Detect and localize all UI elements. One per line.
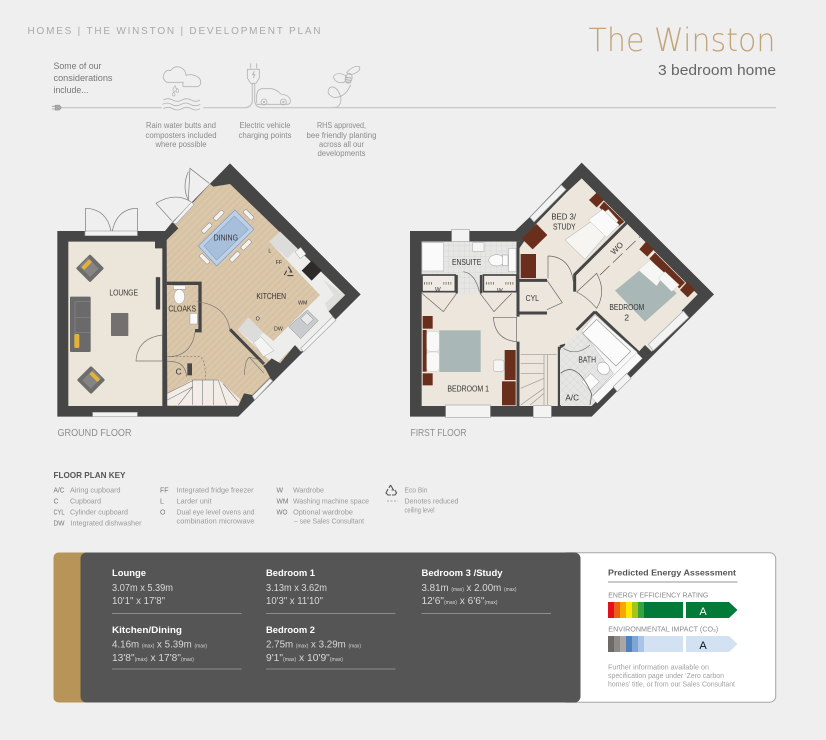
key column 2: FF xyxy=(160,488,169,494)
room labels xyxy=(435,211,644,402)
caption: bee friendly: RHS approved, xyxy=(317,121,366,130)
bedroom 3 dimensions: 3.81m (max) x 2.00m (max) xyxy=(422,583,517,594)
floor plan key xyxy=(54,470,459,528)
room labels: FF xyxy=(276,260,283,266)
breadcrumb header: HOMES | THE WINSTON | DEVELOPMENT PLAN xyxy=(28,26,320,37)
key column 4: Denotes reduced xyxy=(404,498,459,506)
walls outer xyxy=(57,163,361,417)
sofa xyxy=(70,297,91,352)
coffee table xyxy=(111,313,128,336)
caption: rain water: Rain water butts and xyxy=(146,121,216,130)
bedroom 3 dimensions xyxy=(422,568,551,614)
bedroom 2 dimensions: 2.75m (max) x 3.29m (max) xyxy=(266,640,361,650)
wardrobes xyxy=(422,275,517,292)
bedroom 3 dimensions: 12'6"(max) x 6'6"(max) xyxy=(422,596,498,607)
room labels: ENSUITE xyxy=(452,257,482,267)
caption: bee friendly: across all our xyxy=(319,140,364,149)
caption: electric vehicle: Electric vehicle xyxy=(240,121,291,130)
walls outer xyxy=(410,163,714,417)
key column 3: WO xyxy=(276,510,288,516)
icon: plug end xyxy=(52,105,61,110)
room labels: WM xyxy=(298,300,307,306)
icon: eco bin xyxy=(284,267,293,276)
room labels: W xyxy=(497,289,503,295)
room labels: DINING xyxy=(214,232,238,242)
armchair bottom xyxy=(77,366,105,394)
bathroom xyxy=(560,315,642,405)
intro text xyxy=(54,61,113,95)
doors xyxy=(422,256,602,342)
brown furniture xyxy=(423,193,695,405)
key column 3: Washing machine space xyxy=(293,498,369,506)
ground floor label: GROUND FLOOR xyxy=(58,427,132,439)
icon: rain cloud xyxy=(162,67,201,110)
key column 2: O xyxy=(160,510,166,516)
room labels: KITCHEN xyxy=(256,291,286,301)
room labels: BEDROOM 1 xyxy=(447,383,489,393)
key column 4: ceiling level xyxy=(404,508,435,514)
dining table xyxy=(198,209,254,266)
key column 1: CYL xyxy=(54,510,65,516)
room dimensions panel xyxy=(80,552,580,702)
intro text: Some of our xyxy=(54,61,102,71)
energy heading: Predicted Energy Assessment xyxy=(608,568,736,578)
wood floor xyxy=(167,184,345,406)
room labels: DW xyxy=(274,326,284,332)
key column 3 xyxy=(276,488,369,526)
room labels: STUDY xyxy=(553,221,576,231)
sink xyxy=(289,310,318,339)
energy footnote: Further information available on xyxy=(608,664,709,672)
room labels: 2 xyxy=(624,312,629,322)
energy footnote: homes’ title, or from our Sales Consultant xyxy=(608,682,735,688)
caption: electric vehicle xyxy=(238,121,292,140)
windows xyxy=(446,185,689,418)
subtitle: 3 bedroom home xyxy=(658,62,776,79)
interior walls xyxy=(457,223,638,406)
key column 1: Cylinder cupboard xyxy=(70,510,128,516)
bedroom 1 dimensions: 3.13m x 3.62m xyxy=(266,583,327,594)
bedroom 3 dimensions: Bedroom 3 /Study xyxy=(422,568,503,579)
icon: bee xyxy=(328,66,360,107)
environmental impact rating xyxy=(608,625,738,652)
ground floor plan xyxy=(57,163,361,417)
room labels: O xyxy=(256,317,260,323)
toilet and basin xyxy=(173,285,197,324)
key column 2: Integrated fridge freezer xyxy=(176,488,254,494)
key heading: FLOOR PLAN KEY xyxy=(54,470,126,480)
kitchen dimensions: Kitchen/Dining xyxy=(112,625,182,636)
key column 3: W xyxy=(276,488,284,494)
key column 4: Eco Bin xyxy=(404,488,428,494)
lounge dimensions: 3.07m x 5.39m xyxy=(112,583,173,594)
ensuite floor xyxy=(422,242,517,293)
key column 3: Wardrobe xyxy=(293,488,324,494)
caption: bee friendly: bee friendly planting xyxy=(306,131,376,140)
room labels: BEDROOM xyxy=(609,302,644,312)
lounge dimensions xyxy=(112,568,242,614)
key column 1: DW xyxy=(54,520,65,528)
first floor plan xyxy=(410,163,714,418)
key column 3: Optional wardrobe xyxy=(293,510,353,516)
title: The Winston xyxy=(588,21,776,59)
windows and door openings xyxy=(85,202,336,417)
kitchen dimensions xyxy=(112,625,242,669)
room labels: W xyxy=(435,287,441,293)
kitchen dimensions: 4.16m (max) x 5.39m (max) xyxy=(112,640,207,650)
energy footnote xyxy=(608,664,735,688)
key column 1 xyxy=(54,488,142,528)
gold tab xyxy=(54,552,114,702)
intro text: considerations xyxy=(54,73,113,83)
room labels: LOUNGE xyxy=(109,287,138,297)
icons and connecting cable xyxy=(52,63,776,110)
caption: bee friendly xyxy=(306,121,376,158)
room labels: C xyxy=(176,366,182,376)
interior walls xyxy=(156,242,264,406)
bedroom 2 dimensions: Bedroom 2 xyxy=(266,625,315,636)
caption: rain water: where possible xyxy=(155,140,207,149)
beds xyxy=(427,209,679,372)
stairs xyxy=(521,355,557,405)
first floor label: FIRST FLOOR xyxy=(410,427,467,439)
lounge dimensions: Lounge xyxy=(112,568,146,579)
intro text: include... xyxy=(54,85,88,95)
wardrobe WO dashed xyxy=(600,237,640,275)
key column 2: Larder unit xyxy=(176,498,212,506)
energy efficiency rating xyxy=(608,590,738,618)
armchair top xyxy=(76,254,104,282)
caption: bee friendly: developments xyxy=(318,149,366,158)
key column 2: Dual eye level ovens and xyxy=(176,510,255,516)
key column 1: Integrated dishwasher xyxy=(70,520,142,528)
room labels: WO xyxy=(609,240,625,256)
room labels: L xyxy=(268,249,271,255)
key column 2: combination microwave xyxy=(176,518,255,526)
stairs xyxy=(167,379,240,405)
caption: electric vehicle: charging points xyxy=(238,131,292,140)
key column 2 xyxy=(160,488,255,526)
room labels: A/C xyxy=(565,392,579,402)
caption: rain water xyxy=(146,121,216,149)
kitchen counter xyxy=(238,232,345,366)
room labels: CLOAKS xyxy=(168,304,196,314)
bedroom 2 dimensions xyxy=(266,625,396,669)
room labels: CYL xyxy=(526,293,539,303)
key column 3: – see Sales Consultant xyxy=(294,518,364,526)
environmental impact rating: A xyxy=(699,640,707,652)
bedroom 1 dimensions xyxy=(266,568,396,614)
key column 1: A/C xyxy=(54,488,64,494)
kitchen dimensions: 13'8"(max) x 17'8"(max) xyxy=(112,653,194,664)
energy efficiency rating: A xyxy=(699,606,707,618)
lounge dimensions: 10'1" x 17'8" xyxy=(112,596,165,607)
room labels: BATH xyxy=(578,354,596,364)
considerations strip xyxy=(52,61,776,158)
key column 1: C xyxy=(54,498,59,506)
hob xyxy=(302,261,322,281)
key column 2: L xyxy=(160,498,164,506)
key column 1: Cupboard xyxy=(70,498,101,506)
bedroom 1 dimensions: 10'3" x 11'10" xyxy=(266,596,323,607)
room labels: BED 3/ xyxy=(551,211,577,221)
key column 1: Airing cupboard xyxy=(70,488,121,494)
caption: rain water: composters included xyxy=(146,131,216,140)
room labels xyxy=(109,232,307,376)
key column 3: WM xyxy=(276,498,289,506)
energy assessment panel xyxy=(560,553,776,702)
environmental impact rating: ENVIRONMENTAL IMPACT (CO₂) xyxy=(608,625,719,634)
title xyxy=(588,21,776,79)
energy efficiency rating: ENERGY EFFICIENCY RATING xyxy=(608,590,708,600)
icon: EV plug and car xyxy=(247,63,290,105)
door swings xyxy=(86,168,264,380)
floors xyxy=(422,178,698,406)
energy footnote: specification page under ‘Zero carbon xyxy=(608,673,724,680)
lounge floor xyxy=(68,242,162,406)
bedroom 2 dimensions: 9'1"(max) x 10'9"(max) xyxy=(266,653,343,664)
bedroom 1 dimensions: Bedroom 1 xyxy=(266,568,316,579)
key column 4 xyxy=(386,485,459,514)
